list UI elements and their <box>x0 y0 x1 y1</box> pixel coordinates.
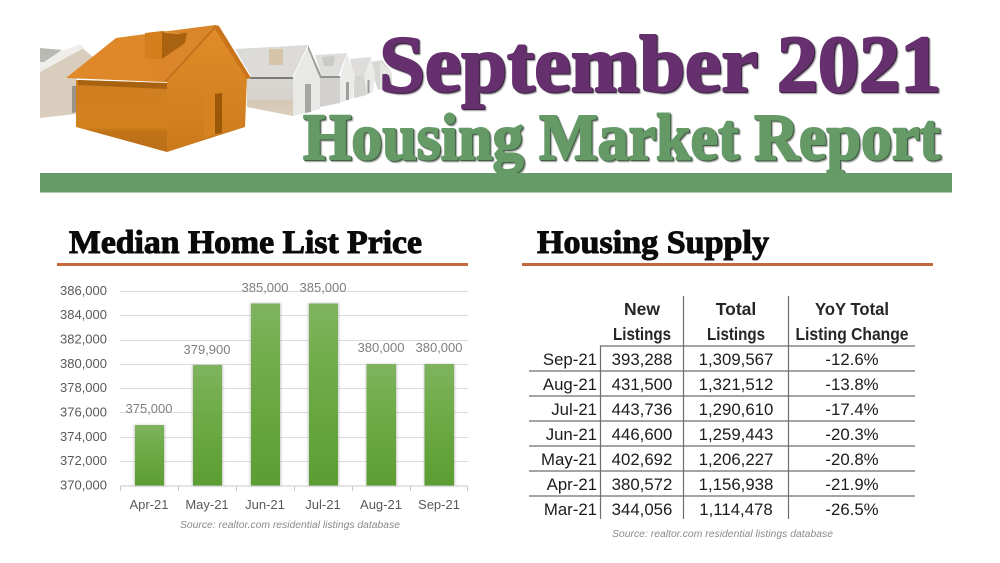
row: Apr-21 <box>547 475 879 494</box>
y axis labels: 384,000 <box>60 307 107 322</box>
y axis labels: 374,000 <box>60 429 107 444</box>
icon: far left beige house <box>40 44 93 118</box>
row: Jul-21 <box>551 400 879 419</box>
source note: Source: realtor.com residential listings database <box>180 520 400 531</box>
row: Apr-21: -21.9% <box>825 475 879 494</box>
row: Aug-21: -13.8% <box>825 375 879 394</box>
table header: Listings <box>613 324 671 344</box>
row: Aug-21: 431,500 <box>612 375 672 394</box>
banner: house row illustration <box>40 25 392 152</box>
heading underline <box>57 263 468 266</box>
row: Apr-21: Apr-21 <box>547 475 597 494</box>
bar shadows <box>134 303 455 486</box>
x axis line and ticks <box>120 486 468 491</box>
row: Mar-21: -26.5% <box>825 500 879 519</box>
icon: grey house 2 <box>235 45 322 116</box>
row: Jun-21: Jun-21 <box>546 425 597 444</box>
y axis labels: 386,000 <box>60 283 107 298</box>
row: May-21: -20.8% <box>825 450 879 469</box>
row: Mar-21: Mar-21 <box>544 500 597 519</box>
data labels: 375,000 <box>126 401 172 416</box>
y axis labels: 378,000 <box>60 380 107 395</box>
heading underline <box>522 263 933 266</box>
row: Jul-21: 1,290,610 <box>699 400 773 419</box>
row: Aug-21 <box>543 375 879 394</box>
y axis labels: 376,000 <box>60 404 107 420</box>
icon: orange house <box>66 25 251 152</box>
data labels <box>126 280 462 416</box>
icon: grey house 3 <box>315 53 355 107</box>
bar chart <box>60 280 468 512</box>
y axis labels: 372,000 <box>60 453 107 468</box>
row: Sep-21: -12.6% <box>825 350 879 369</box>
y axis labels <box>60 283 107 492</box>
row: Sep-21: 393,288 <box>612 350 672 369</box>
icon: door <box>204 93 222 137</box>
icon: grey house 5 <box>371 60 392 90</box>
row: Mar-21: 344,056 <box>612 500 672 519</box>
row: Jun-21: 1,259,443 <box>699 425 773 444</box>
row: Sep-21: Sep-21 <box>543 350 597 369</box>
row: Mar-21 <box>544 500 879 519</box>
banner green bar <box>40 173 952 192</box>
row: May-21: May-21 <box>541 450 597 469</box>
data labels: 385,000 <box>242 280 288 295</box>
icon: grey house 4 <box>350 57 375 98</box>
row: May-21 <box>541 450 879 469</box>
x axis labels: Sep-21 <box>418 497 460 512</box>
row: Sep-21 <box>543 350 879 369</box>
table header: New <box>624 299 660 319</box>
table header: Listings <box>707 324 765 344</box>
icon: dormer <box>145 31 187 59</box>
table header <box>613 299 909 344</box>
row: Aug-21: Aug-21 <box>543 375 597 394</box>
x axis labels: May-21 <box>185 497 229 512</box>
table: housing supply <box>529 296 915 519</box>
row: Jun-21: -20.3% <box>825 425 879 444</box>
row: Jun-21: 446,600 <box>612 425 672 444</box>
x axis labels: Jul-21 <box>305 497 341 512</box>
row: May-21: 402,692 <box>612 450 672 469</box>
heading: housing supply: Housing Supply <box>537 225 770 261</box>
bars <box>135 304 454 486</box>
y axis labels: 380,000 <box>60 356 107 371</box>
y axis labels: 370,000 <box>60 478 107 492</box>
data labels: 379,900 <box>184 342 230 357</box>
row: Mar-21: 1,114,478 <box>699 500 773 519</box>
panel: median home list price <box>57 225 468 531</box>
x axis labels: Apr-21 <box>129 497 169 512</box>
x axis labels: Aug-21 <box>360 497 402 512</box>
row: Aug-21: 1,321,512 <box>699 375 773 394</box>
y axis labels: 382,000 <box>60 332 107 346</box>
source note: Source: realtor.com residential listings database <box>612 529 833 540</box>
row: Apr-21: 1,156,938 <box>699 475 773 494</box>
title: September 2021: September 2021 <box>379 21 941 109</box>
row: May-21: 1,206,227 <box>699 450 773 469</box>
table header: YoY Total <box>815 299 889 319</box>
x axis labels: Jun-21 <box>245 497 285 512</box>
data labels: 380,000 <box>358 340 404 355</box>
row: Jul-21: 443,736 <box>612 400 672 419</box>
subtitle: Housing Market Report: Housing Market Report <box>303 101 940 174</box>
panel: housing supply <box>522 225 933 540</box>
row: Sep-21: 1,309,567 <box>699 350 773 369</box>
row: Jun-21 <box>546 425 879 444</box>
row: Jul-21: Jul-21 <box>551 400 597 419</box>
row: Apr-21: 380,572 <box>612 475 672 494</box>
data labels: 380,000 <box>416 340 462 355</box>
heading: median home list price: Median Home List Price <box>69 225 422 261</box>
table header: Listing Change <box>796 324 909 344</box>
data labels: 385,000 <box>300 280 346 295</box>
table header: Total <box>716 299 756 319</box>
x axis labels <box>129 497 460 512</box>
row: Jul-21: -17.4% <box>825 400 879 419</box>
